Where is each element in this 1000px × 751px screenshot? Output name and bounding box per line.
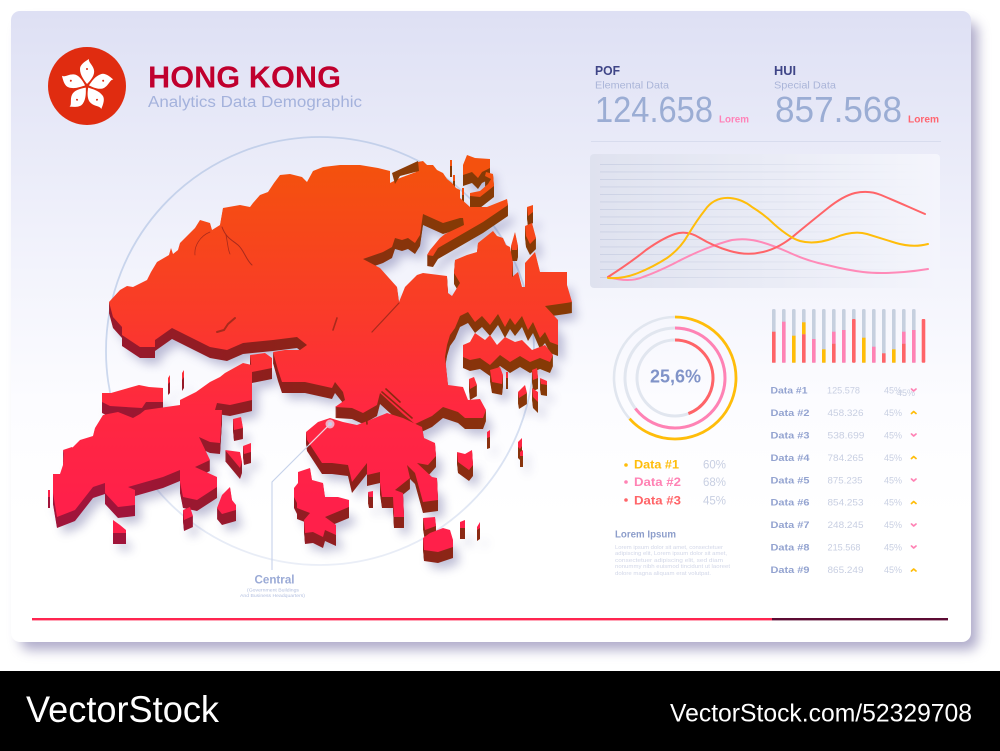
data table: 854.253: [828, 498, 864, 508]
donut legend: [624, 458, 726, 508]
data table: 215.568: [828, 542, 860, 554]
stat: HUI: HUI: [774, 63, 796, 78]
data table: Data #7: [770, 520, 810, 531]
data table: 45%: [884, 520, 903, 531]
stat: POF: Lorem: [719, 114, 749, 126]
data table: 45%: [884, 408, 903, 419]
data table: 125.578: [827, 386, 860, 396]
callout: Central: And Business Headquarters): [240, 593, 306, 598]
data table: Data #1: [770, 386, 808, 396]
donut legend: 60%: [703, 458, 726, 472]
data table: 45%: [884, 453, 903, 464]
title: HONG KONG: [148, 60, 341, 94]
data table: 875.235: [828, 476, 862, 486]
data table: Data #4: [770, 453, 810, 464]
donut legend: 68%: [703, 475, 726, 489]
data table: Data #8: [770, 542, 810, 554]
data table: 458.326: [828, 408, 864, 419]
text block: Lorem Ipsum: Lorem Ipsum: [615, 530, 676, 540]
stat: POF: POF: [595, 63, 620, 78]
callout: Central: Central: [254, 574, 294, 586]
text block: Lorem Ipsum: nonummy nibh euismod tincidunt ut laoreet: [615, 564, 731, 570]
data table: 45%: [884, 542, 903, 554]
data table: 248.245: [828, 520, 864, 531]
map: Hong Kong 3D: [48, 155, 578, 569]
stat: POF: [595, 63, 749, 130]
line chart: [590, 154, 940, 288]
stat: HUI: Lorem: [908, 114, 939, 126]
footer bar: [0, 671, 1000, 751]
stat: HUI: [774, 63, 939, 130]
data table: 45%: [884, 476, 903, 486]
data table: 865.249: [828, 565, 864, 576]
stat: HUI: 857.568: [775, 89, 902, 130]
footer bar: VectorStock: [26, 689, 219, 730]
bar chart: [772, 309, 925, 363]
data table: 45%: [884, 498, 903, 508]
data table: Data #3: [770, 430, 810, 442]
stat: POF: 124.658: [595, 89, 713, 130]
data table: Data #2: [770, 408, 810, 419]
text block: Lorem Ipsum: consectetuer adipiscing elit, sed diam: [615, 558, 723, 564]
text block: Lorem Ipsum: dolore magna aliquam erat volutpat.: [615, 571, 712, 577]
donut chart: 25,6%: [650, 366, 701, 386]
callout: Central: (Government Buildings: [247, 588, 300, 592]
callout: Central: [240, 420, 334, 598]
footer bar: VectorStock.com/52329708: [670, 700, 972, 728]
donut legend: Data #1: [634, 458, 679, 472]
data table: Data #6: [770, 498, 810, 508]
stat: HUI: Special Data: [774, 80, 836, 92]
data table: 45%: [897, 388, 916, 399]
donut legend: Data #3: [634, 494, 681, 508]
donut legend: 45%: [703, 494, 726, 508]
flag badge: [48, 47, 126, 125]
text block: Lorem Ipsum: Lorem ipsum dolor sit amet, consectetuer: [615, 545, 723, 551]
donut legend: Data #2: [634, 475, 681, 489]
data table: 538.699: [828, 430, 864, 442]
text block: Lorem Ipsum: [615, 530, 731, 577]
data table: Data #9: [770, 565, 810, 576]
stat: POF: Elemental Data: [595, 80, 669, 92]
data table: Data #5: [770, 476, 810, 486]
data table: 45%: [884, 386, 903, 396]
data table: 784.265: [828, 453, 864, 464]
text block: Lorem Ipsum: adipiscing elit, Lorem ipsum dolor sit amet,: [615, 551, 728, 557]
range circle: [106, 137, 534, 565]
donut chart: [614, 317, 736, 439]
bottom rule: [32, 618, 948, 620]
data table: [770, 386, 916, 576]
subtitle: Analytics Data Demographic: [148, 94, 362, 111]
data table: 45%: [884, 430, 903, 442]
data table: 45%: [884, 565, 903, 576]
